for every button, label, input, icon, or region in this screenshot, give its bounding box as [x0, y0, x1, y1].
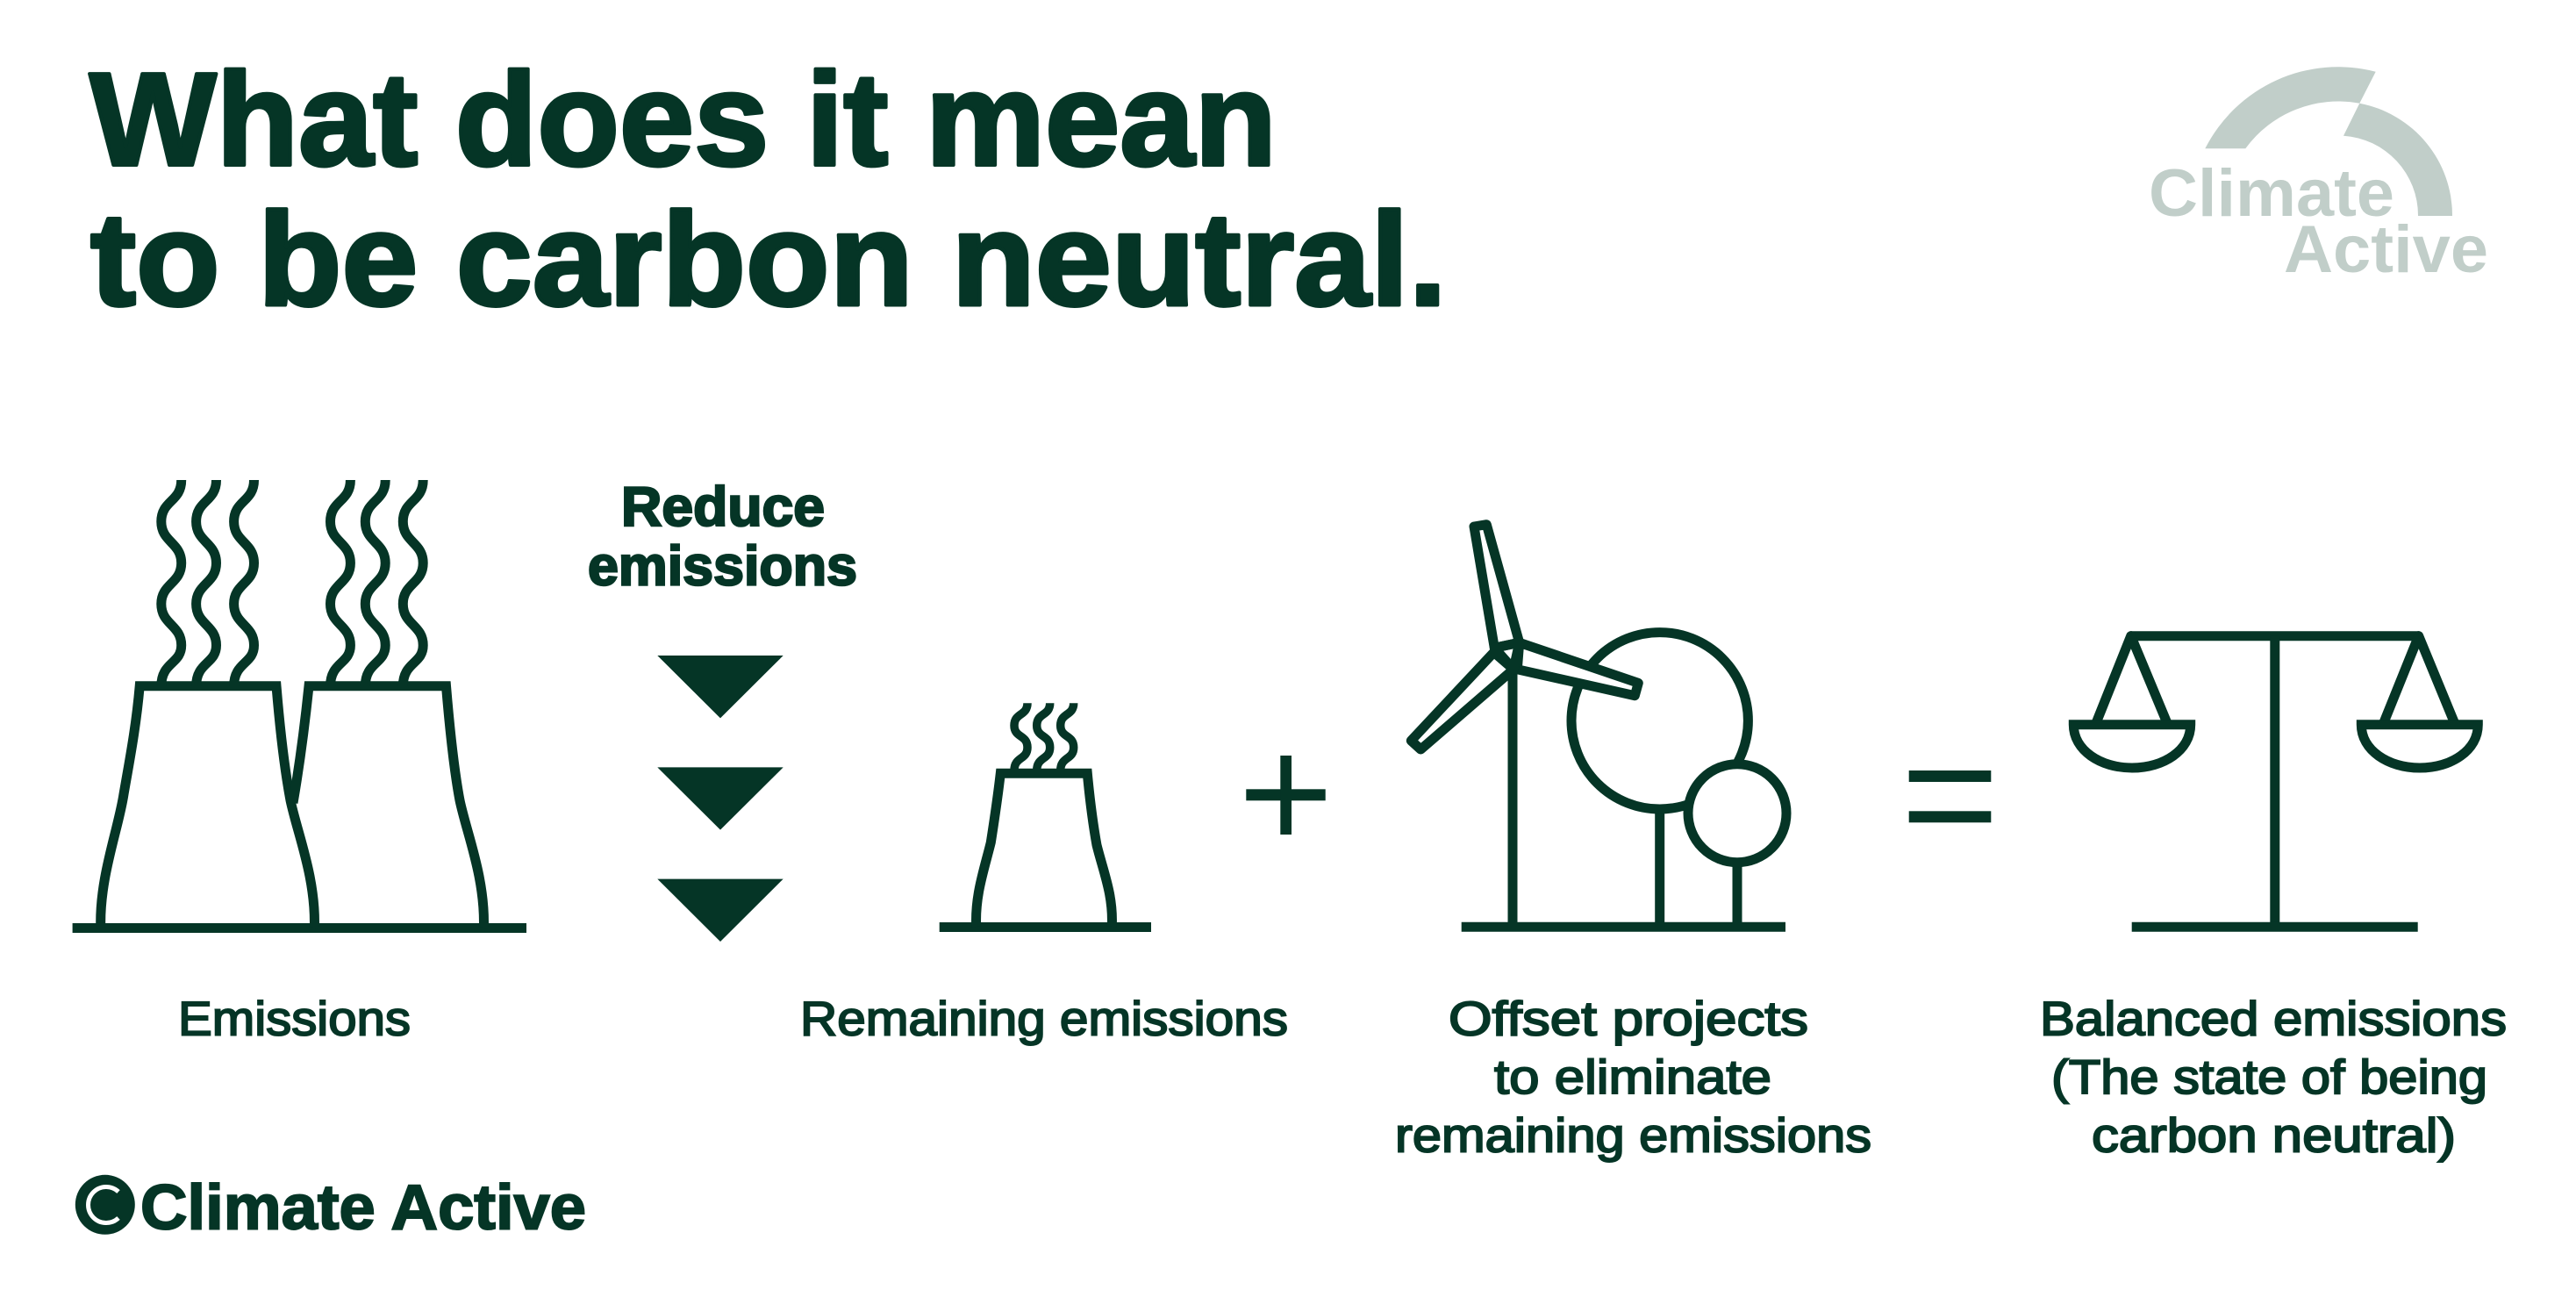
label: balanced emissions: Balanced emissions	[2040, 992, 2507, 1046]
label: offset projects	[1395, 992, 1871, 1163]
title	[89, 45, 1447, 333]
panel: offset projects	[1395, 525, 1871, 1163]
label: remaining emissions: Remaining emissions	[800, 992, 1288, 1046]
title: to be carbon neutral.	[90, 184, 1447, 333]
icon: single small cooling tower	[940, 703, 1151, 927]
logo arc	[2205, 67, 2452, 216]
logo mark: C in circle	[75, 1175, 135, 1235]
icon: two cooling towers with smoke	[73, 480, 526, 928]
heading: reduce emissions: Reduce	[621, 477, 825, 538]
logo: Climate Active footer	[75, 1173, 586, 1243]
label: offset projects: remaining emissions	[1395, 1108, 1871, 1163]
panel: emissions	[73, 480, 526, 1046]
panel: reduce emissions	[588, 477, 857, 942]
label: balanced emissions: carbon neutral)	[2092, 1108, 2456, 1163]
logo wordmark: Climate Active	[140, 1173, 586, 1243]
label: offset projects: to eliminate	[1494, 1050, 1771, 1104]
panel: balanced emissions	[2040, 636, 2507, 1163]
heading: reduce emissions: emissions	[588, 535, 857, 597]
icon: balance scales	[2073, 636, 2478, 927]
logo: Climate Active arc, top right	[2149, 67, 2488, 287]
title: What does it mean	[89, 45, 1277, 193]
label: offset projects: Offset projects	[1449, 992, 1808, 1046]
logo wordmark: Active	[2284, 212, 2488, 287]
label: emissions: Emissions	[178, 992, 411, 1046]
arrows: three downward triangles	[657, 656, 784, 942]
icon: equals sign	[1909, 770, 1991, 822]
heading: reduce emissions	[588, 477, 857, 597]
logo wordmark: Climate	[2149, 156, 2394, 231]
icon: wind turbine and trees	[1411, 525, 1786, 927]
icon: plus sign	[1246, 756, 1326, 835]
label: balanced emissions	[2040, 992, 2507, 1163]
label: balanced emissions: (The state of being	[2051, 1050, 2487, 1104]
logo wordmark	[2149, 156, 2488, 287]
panel: remaining emissions	[800, 703, 1288, 1046]
